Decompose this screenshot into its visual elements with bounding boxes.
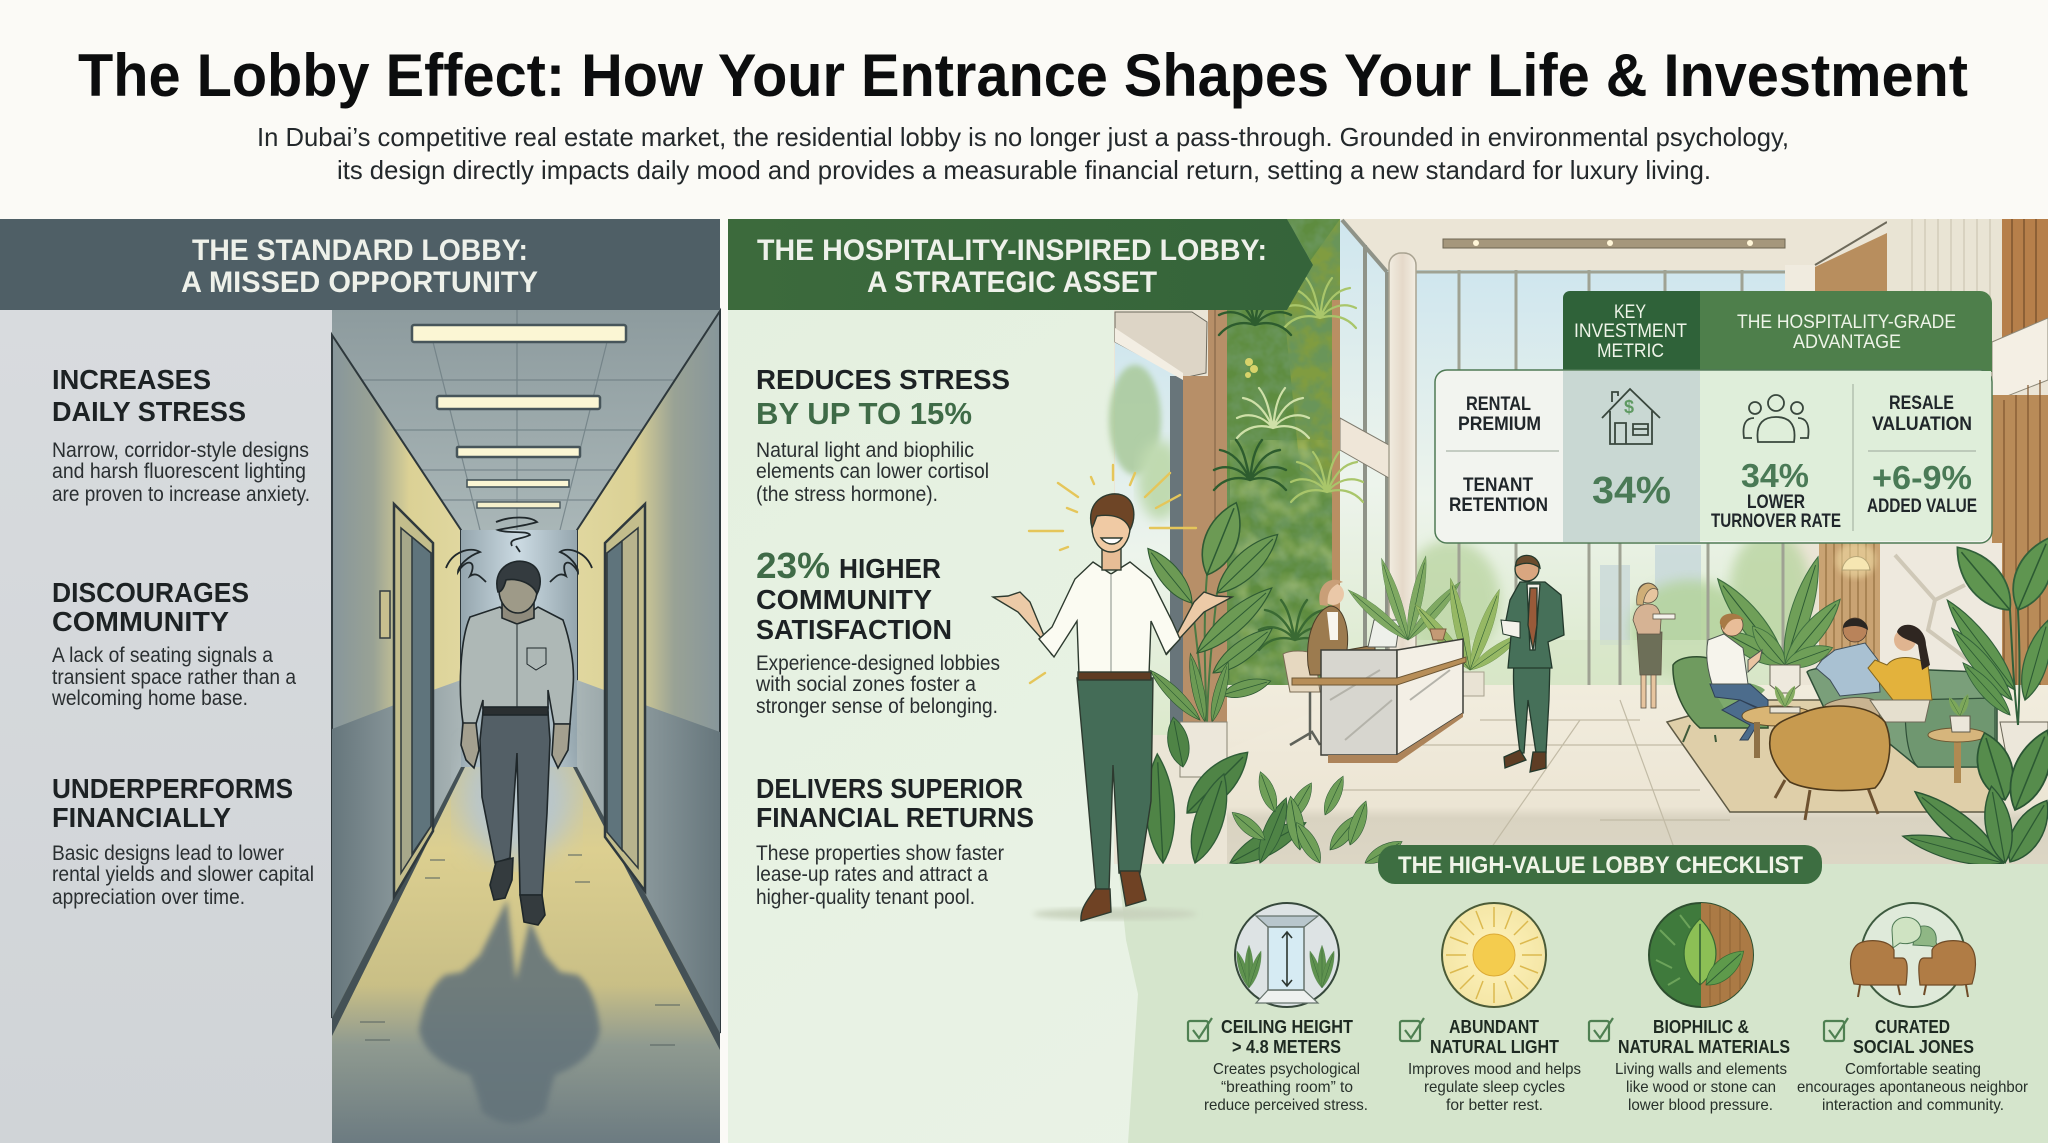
- belt: [483, 707, 548, 715]
- advantage value: turnover: TURNOVER RATE: [1711, 511, 1841, 532]
- wood column: [1183, 310, 1227, 751]
- checklist item: biophilic materials: [1589, 903, 1790, 1114]
- intro text: its design directly impacts daily mood and provides a measurable financial return, setting a new standard for luxury living.: [337, 155, 1711, 185]
- point: increases daily stress: are proven to increase anxiety.: [52, 483, 310, 506]
- checklist item: ceiling height: “breathing room” to: [1221, 1079, 1353, 1096]
- checklist item: ceiling height: reduce perceived stress.: [1204, 1097, 1368, 1114]
- checkbox: [1400, 1018, 1424, 1041]
- checklist item: natural light: ABUNDANT: [1449, 1017, 1539, 1037]
- corridor ceiling: [332, 310, 720, 530]
- point: underperforms financially: [52, 773, 314, 909]
- investment table: [1435, 291, 1992, 543]
- left door: [394, 504, 433, 897]
- back plants: [1345, 555, 1524, 696]
- checklist item: biophilic materials: BIOPHILIC &: [1653, 1017, 1749, 1037]
- point: increases daily stress: [52, 364, 310, 506]
- back wall glow: [461, 530, 577, 767]
- advantage value: turnover: [1711, 457, 1841, 532]
- hospitality header arrow: [728, 219, 1313, 310]
- checklist item: ceiling height: > 4.8 METERS: [1232, 1037, 1341, 1057]
- corridor floor: [332, 767, 720, 1143]
- large glass windows: [1400, 270, 1810, 685]
- point: financial returns: lease-up rates and attract a: [756, 863, 988, 886]
- advantage value: turnover: 34%: [1741, 457, 1809, 494]
- checklist item: social zones: interaction and community.: [1822, 1097, 2004, 1114]
- point: discourages community: welcoming home base.: [51, 687, 248, 710]
- coffee table: [1742, 684, 1814, 758]
- lobby ceiling and wall base: [1114, 310, 2048, 864]
- shirt details: [517, 625, 546, 707]
- point: discourages community: DISCOURAGES: [52, 577, 249, 608]
- table header: key metric: [1563, 291, 1700, 372]
- resale label: RESALE: [1889, 393, 1954, 414]
- checklist item: natural light: [1400, 903, 1581, 1114]
- checklist item: natural light: NATURAL LIGHT: [1430, 1037, 1559, 1057]
- rug: [1667, 700, 2000, 812]
- point: community satisfaction: stronger sense of belonging.: [756, 695, 998, 718]
- point: financial returns: FINANCIAL RETURNS: [756, 802, 1034, 833]
- table header: key metric: KEY: [1614, 302, 1646, 323]
- cuffs and hands: [461, 723, 570, 768]
- point: underperforms financially: Basic designs lead to lower: [52, 842, 284, 865]
- table header: key metric: METRIC: [1597, 341, 1664, 362]
- standard lobby text background: [0, 310, 332, 1143]
- green lounge chair with man: [1673, 614, 1768, 742]
- seating plant: [1709, 554, 1848, 693]
- point: discourages community: A lack of seating signals a: [52, 644, 273, 667]
- checklist item: social zones: SOCIAL JONES: [1853, 1037, 1974, 1057]
- table header: hospitality advantage: [1700, 291, 1992, 372]
- column: [1389, 253, 1416, 693]
- advantage column: [1700, 371, 1991, 541]
- ceiling lights: [412, 325, 626, 508]
- floor scuffs: [360, 855, 680, 1045]
- advantage value: resale: [1867, 459, 1977, 517]
- right wood and marble walls: [1785, 219, 2048, 735]
- man in green suit: [1501, 555, 1564, 772]
- shirt and arms: [460, 607, 573, 724]
- point: underperforms financially: appreciation over time.: [52, 886, 245, 909]
- blossoms: [1245, 358, 1258, 378]
- checklist item: biophilic materials: like wood or stone can: [1626, 1079, 1776, 1096]
- illustration: dim corridor with stressed man: [332, 310, 720, 1143]
- big plant right: [1900, 532, 2048, 873]
- checklist panel background: [1118, 864, 2048, 1143]
- point: discourages community: transient space rather than a: [52, 666, 296, 689]
- pendant lamp: [1836, 542, 1876, 578]
- point: reduces stress: (the stress hormone).: [756, 483, 938, 506]
- point: community satisfaction: with social zones foster a: [755, 673, 976, 696]
- icon: tall ceiling: [1233, 903, 1339, 1007]
- row labels: [1449, 394, 1548, 516]
- point: community satisfaction: HIGHER: [839, 553, 941, 584]
- point: increases daily stress: DAILY STRESS: [52, 396, 246, 427]
- green sofa with two people: [1807, 618, 1997, 767]
- point: financial returns: [756, 773, 1034, 909]
- checklist item: natural light: for better rest.: [1446, 1097, 1543, 1114]
- checklist heading pill: THE HIGH-VALUE LOBBY CHECKLIST: [1398, 852, 1803, 879]
- point: underperforms financially: FINANCIALLY: [52, 802, 231, 833]
- ferns on wall: [1214, 278, 1363, 650]
- reception desk with receptionist: [1283, 555, 1524, 763]
- point: reduces stress: [756, 364, 1010, 506]
- point: financial returns: DELIVERS SUPERIOR: [756, 773, 1023, 804]
- point: discourages community: [51, 577, 296, 710]
- panel: standard lobby: [0, 219, 720, 1143]
- resale label: VALUATION: [1872, 414, 1972, 435]
- point: reduces stress: BY UP TO 15%: [756, 396, 972, 431]
- point: increases daily stress: Narrow, corridor-style designs: [52, 439, 309, 462]
- man's head: [1091, 494, 1134, 570]
- icon: people group: [1743, 395, 1809, 442]
- point: reduces stress: REDUCES STRESS: [756, 364, 1010, 395]
- point: reduces stress: elements can lower cortisol: [756, 460, 989, 483]
- row labels: TENANT: [1463, 475, 1533, 496]
- head: [502, 598, 534, 624]
- shoes: [490, 858, 513, 900]
- plant pot: [1180, 722, 1227, 777]
- trousers: [480, 712, 550, 895]
- checkbox: [1824, 1018, 1848, 1041]
- table rules: [1446, 384, 1976, 531]
- icon: house with dollar: $: [1624, 397, 1634, 417]
- stress scribbles: [446, 518, 592, 582]
- wall sign: [380, 591, 390, 638]
- stressed man: [460, 561, 573, 925]
- row labels: RETENTION: [1449, 495, 1548, 516]
- right door: [605, 504, 645, 891]
- point: financial returns: higher-quality tenant pool.: [756, 886, 975, 909]
- intro text: [257, 122, 1789, 185]
- man's shirt: [1039, 562, 1180, 675]
- checklist item: ceiling height: CEILING HEIGHT: [1221, 1017, 1353, 1037]
- man's shadow: [419, 900, 600, 1124]
- checkbox: [1188, 1018, 1212, 1041]
- checklist item: ceiling height: [1188, 903, 1368, 1114]
- checklist item: biophilic materials: lower blood pressure.: [1628, 1097, 1773, 1114]
- icon: armchairs and speech bubbles: [1851, 903, 1975, 1007]
- ceiling light strip: [1443, 239, 1785, 248]
- standard lobby header: THE STANDARD LOBBY:: [192, 234, 528, 267]
- hospitality header arrow: THE HOSPITALITY-INSPIRED LOBBY:: [757, 234, 1267, 267]
- table header: key metric: INVESTMENT: [1574, 321, 1687, 342]
- point: community satisfaction: [755, 545, 1000, 718]
- standard lobby header: [0, 219, 720, 310]
- checklist item: social zones: [1797, 903, 2029, 1114]
- icon: leaf and wood: [1649, 903, 1753, 1007]
- point: increases daily stress: INCREASES: [52, 364, 211, 395]
- man's ground shadow: [1033, 908, 1197, 920]
- man's trousers: [1077, 678, 1153, 891]
- checklist item: natural light: regulate sleep cycles: [1424, 1079, 1565, 1096]
- checklist heading pill: [1378, 845, 1822, 884]
- checklist item: biophilic materials: NATURAL MATERIALS: [1618, 1037, 1790, 1057]
- row labels: RENTAL: [1466, 394, 1531, 415]
- man's belt: [1078, 672, 1151, 680]
- advantage value: resale: +6-9%: [1872, 459, 1972, 496]
- point: discourages community: COMMUNITY: [52, 606, 229, 637]
- green living wall: [1214, 219, 1363, 752]
- upper window band: [1340, 219, 1389, 700]
- lobby floor: [1227, 685, 2048, 864]
- receptionist: [1308, 580, 1375, 675]
- resale label: [1872, 393, 1972, 435]
- panel: hospitality-inspired lobby: [728, 219, 2048, 1143]
- hospitality header arrow: A STRATEGIC ASSET: [867, 266, 1157, 299]
- point: underperforms financially: rental yields and slower capital: [52, 863, 314, 886]
- icon: sun: [1442, 903, 1546, 1007]
- table header: hospitality advantage: ADVANTAGE: [1793, 332, 1901, 353]
- checklist item: natural light: Improves mood and helps: [1408, 1061, 1581, 1078]
- checklist item: social zones: CURATED: [1875, 1017, 1950, 1037]
- point: community satisfaction: COMMUNITY: [756, 584, 932, 615]
- point: community satisfaction: 23%: [756, 545, 830, 586]
- title: The Lobby Effect: How Your Entrance Shapes Your Life & Investment: [78, 42, 1968, 109]
- table body: [1435, 370, 1992, 543]
- checkbox: [1589, 1018, 1613, 1041]
- happy man: [993, 494, 1232, 921]
- shirt placket: [1110, 574, 1112, 675]
- illustration: bright lobby: [1109, 219, 2048, 873]
- hospitality panel background: [728, 219, 2048, 1143]
- advantage value: resale: ADDED VALUE: [1867, 496, 1977, 517]
- glow rays around man: [1029, 465, 1196, 683]
- icon: house with dollar: [1602, 389, 1660, 444]
- reception chair: [1283, 651, 1320, 745]
- metric column: [1563, 371, 1700, 542]
- left wall: [332, 335, 461, 1018]
- checklist item: biophilic materials: Living walls and elements: [1615, 1061, 1787, 1078]
- row labels: PREMIUM: [1458, 414, 1541, 435]
- woman with clipboard: [1633, 583, 1675, 708]
- point: reduces stress: Natural light and biophilic: [756, 439, 974, 462]
- point: increases daily stress: and harsh fluorescent lighting: [52, 460, 306, 483]
- side table: [1928, 693, 1986, 783]
- point: financial returns: These properties show faster: [756, 842, 1004, 865]
- man's shoes: [1081, 871, 1146, 921]
- foreground foliage left: [1143, 715, 1406, 873]
- table header: hospitality advantage: THE HOSPITALITY-GRADE: [1737, 312, 1956, 333]
- advantage value: turnover: LOWER: [1747, 492, 1805, 513]
- point: underperforms financially: UNDERPERFORMS: [52, 773, 293, 804]
- checklist item: ceiling height: Creates psychological: [1213, 1061, 1360, 1078]
- man's forearms: [993, 592, 1232, 655]
- point: community satisfaction: SATISFACTION: [756, 614, 952, 645]
- standard lobby header: A MISSED OPPORTUNITY: [181, 266, 538, 299]
- desk body: [1321, 650, 1397, 755]
- checklist item: social zones: encourages apontaneous neighbor: [1797, 1079, 2029, 1096]
- intro text: In Dubai’s competitive real estate market, the residential lobby is no longer just a pass-through. Grounded in environmental psychology,: [257, 122, 1789, 152]
- left window with trees: [1109, 312, 1207, 736]
- desk monitor: [1368, 620, 1400, 647]
- plant behind man: [1140, 497, 1286, 725]
- tan armchair: [1770, 706, 1890, 820]
- checklist item: social zones: Comfortable seating: [1845, 1061, 1981, 1078]
- point: community satisfaction: Experience-designed lobbies: [756, 652, 1000, 675]
- metric value: 34%: [1592, 470, 1671, 512]
- right wall: [577, 311, 720, 1033]
